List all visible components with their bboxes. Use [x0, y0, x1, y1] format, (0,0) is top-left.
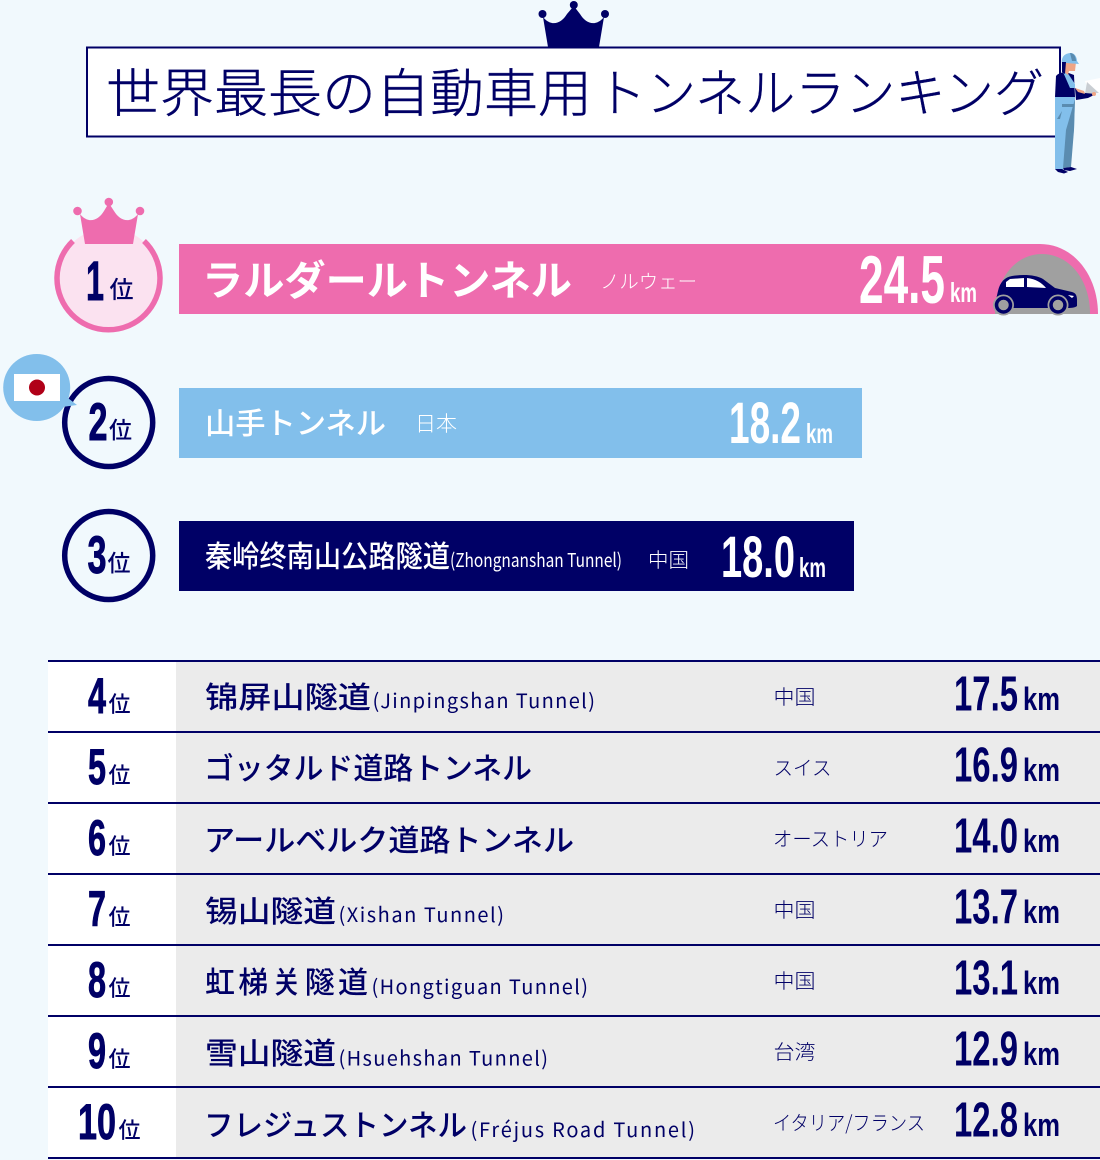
row: rank 10: (Fréjus Road Tunnel) — [470, 1114, 695, 1143]
row: rank 8: 中国 — [774, 965, 816, 994]
row: rank 5: 5 — [88, 739, 106, 795]
row: rank 4: 17.5 — [954, 668, 1018, 722]
icon: Japan flag bubble — [3, 354, 77, 421]
row: rank 10: イタリア/フランス — [773, 1107, 925, 1136]
rank 3 badge: 3 — [88, 526, 106, 585]
row: rank 4: 位 — [108, 687, 131, 719]
row: rank 8: 虹梯关隧道 — [205, 958, 368, 1002]
rank 3 name: 秦岭终南山公路隧道 — [205, 532, 450, 576]
rank 1 badge — [57, 198, 160, 331]
rank 3 country: 中国 — [648, 544, 689, 573]
row: rank 4: (Jinpingshan Tunnel) — [372, 685, 595, 714]
rank 2 bar — [179, 388, 862, 458]
row: rank 8: (Hongtiguan Tunnel) — [372, 971, 588, 1000]
row: rank 7: km — [1023, 894, 1060, 930]
row: rank 7: 锡山隧道 — [205, 887, 336, 931]
row: rank 9: km — [1023, 1036, 1060, 1072]
row: rank 6: 位 — [108, 829, 131, 861]
panel: rank 2 — [3, 354, 862, 466]
rank 1 name: ラルダールトンネル — [202, 247, 572, 307]
row: rank 7: 中国 — [774, 894, 816, 923]
rank 3 bar — [179, 521, 854, 591]
icon: navy crown above title — [538, 1, 609, 47]
row: rank 7: (Xishan Tunnel) — [338, 899, 504, 928]
rank 1 distance: km — [950, 277, 977, 308]
row: rank 8: km — [1023, 965, 1060, 1001]
row: rank 10: フレジュストンネル — [204, 1101, 467, 1145]
row: rank 4: km — [1023, 681, 1060, 717]
row: rank 8: 8 — [88, 952, 106, 1008]
row: rank 5 — [88, 738, 1060, 795]
row: rank 7: 位 — [108, 900, 131, 932]
rank 2 badge: 2 — [88, 393, 108, 452]
rank 3 distance: 18.0 — [721, 525, 795, 590]
rank 1 badge: 1 — [86, 249, 104, 312]
row: rank 10: 位 — [118, 1113, 141, 1145]
row: rank 7 — [88, 880, 1060, 937]
row: rank 9: 9 — [88, 1023, 106, 1079]
rank 1 distance: 24.5 — [859, 242, 945, 318]
row: rank 4: 中国 — [774, 681, 816, 710]
rank 2 badge — [65, 378, 153, 466]
row: rank 5: スイス — [774, 752, 832, 781]
row: rank 10: 10 — [78, 1094, 116, 1150]
row: rank 9 — [88, 1022, 1060, 1079]
row: rank 8: 位 — [108, 971, 131, 1003]
table: ranks 4 to 10 — [48, 660, 1100, 1159]
row: rank 4: 4 — [88, 668, 106, 724]
row: rank 4: 锦屏山隧道 — [205, 673, 371, 717]
row: rank 9: (Hsuehshan Tunnel) — [338, 1042, 548, 1072]
icon: car in tunnel — [993, 254, 1090, 316]
row: rank 5: 位 — [108, 758, 131, 790]
panel: rank 1 — [57, 198, 1098, 331]
row: rank 9: 雪山隧道 — [205, 1029, 336, 1073]
row: rank 8: 13.1 — [954, 952, 1018, 1006]
icon: tunnel worker with clipboard — [1055, 53, 1100, 174]
rank 2 distance: 18.2 — [729, 391, 801, 456]
row: rank 6: オーストリア — [773, 823, 888, 852]
row: rank 9: 12.9 — [954, 1022, 1018, 1076]
row: rank 9: 位 — [108, 1042, 131, 1074]
row: rank 7: 7 — [88, 881, 106, 937]
row: rank 6: アールベルク道路トンネル — [204, 816, 574, 860]
row: rank 4 — [88, 668, 1060, 724]
row: rank 10: km — [1023, 1107, 1060, 1143]
rank 3 english name: (Zhongnanshan Tunnel) — [450, 546, 622, 573]
row: rank 5: 16.9 — [954, 738, 1018, 792]
row: rank 6: 14.0 — [954, 810, 1018, 864]
title text: トンネルランキング — [596, 52, 1044, 127]
row: rank 6: km — [1023, 823, 1060, 859]
panel: rank 3 — [65, 512, 854, 600]
rank 2 country: 日本 — [415, 408, 457, 438]
row: rank 8 — [88, 952, 1060, 1008]
row: rank 6 — [88, 810, 1060, 866]
title text: 世界最長の自動車用 — [106, 52, 592, 127]
title box — [87, 48, 1060, 136]
rank 2 distance: km — [806, 418, 833, 449]
row: rank 6: 6 — [88, 810, 106, 866]
row: rank 10 — [78, 1094, 1060, 1150]
rank 1 bar — [179, 244, 1098, 314]
row: rank 9: 台湾 — [774, 1036, 816, 1065]
row: rank 7: 13.7 — [954, 880, 1018, 934]
rank 2 name: 山手トンネル — [205, 399, 386, 443]
row: rank 10: 12.8 — [954, 1094, 1018, 1148]
rank 1 badge: 位 — [110, 270, 134, 305]
rank 1 country: ノルウェー — [600, 267, 697, 294]
rank 3 distance: km — [799, 552, 826, 583]
row: rank 5: km — [1023, 752, 1060, 788]
rank 2 badge: 位 — [109, 411, 132, 445]
rank 3 badge: 位 — [108, 544, 130, 578]
row: rank 5: ゴッタルド道路トンネル — [204, 744, 532, 788]
rank 3 badge — [65, 512, 153, 600]
